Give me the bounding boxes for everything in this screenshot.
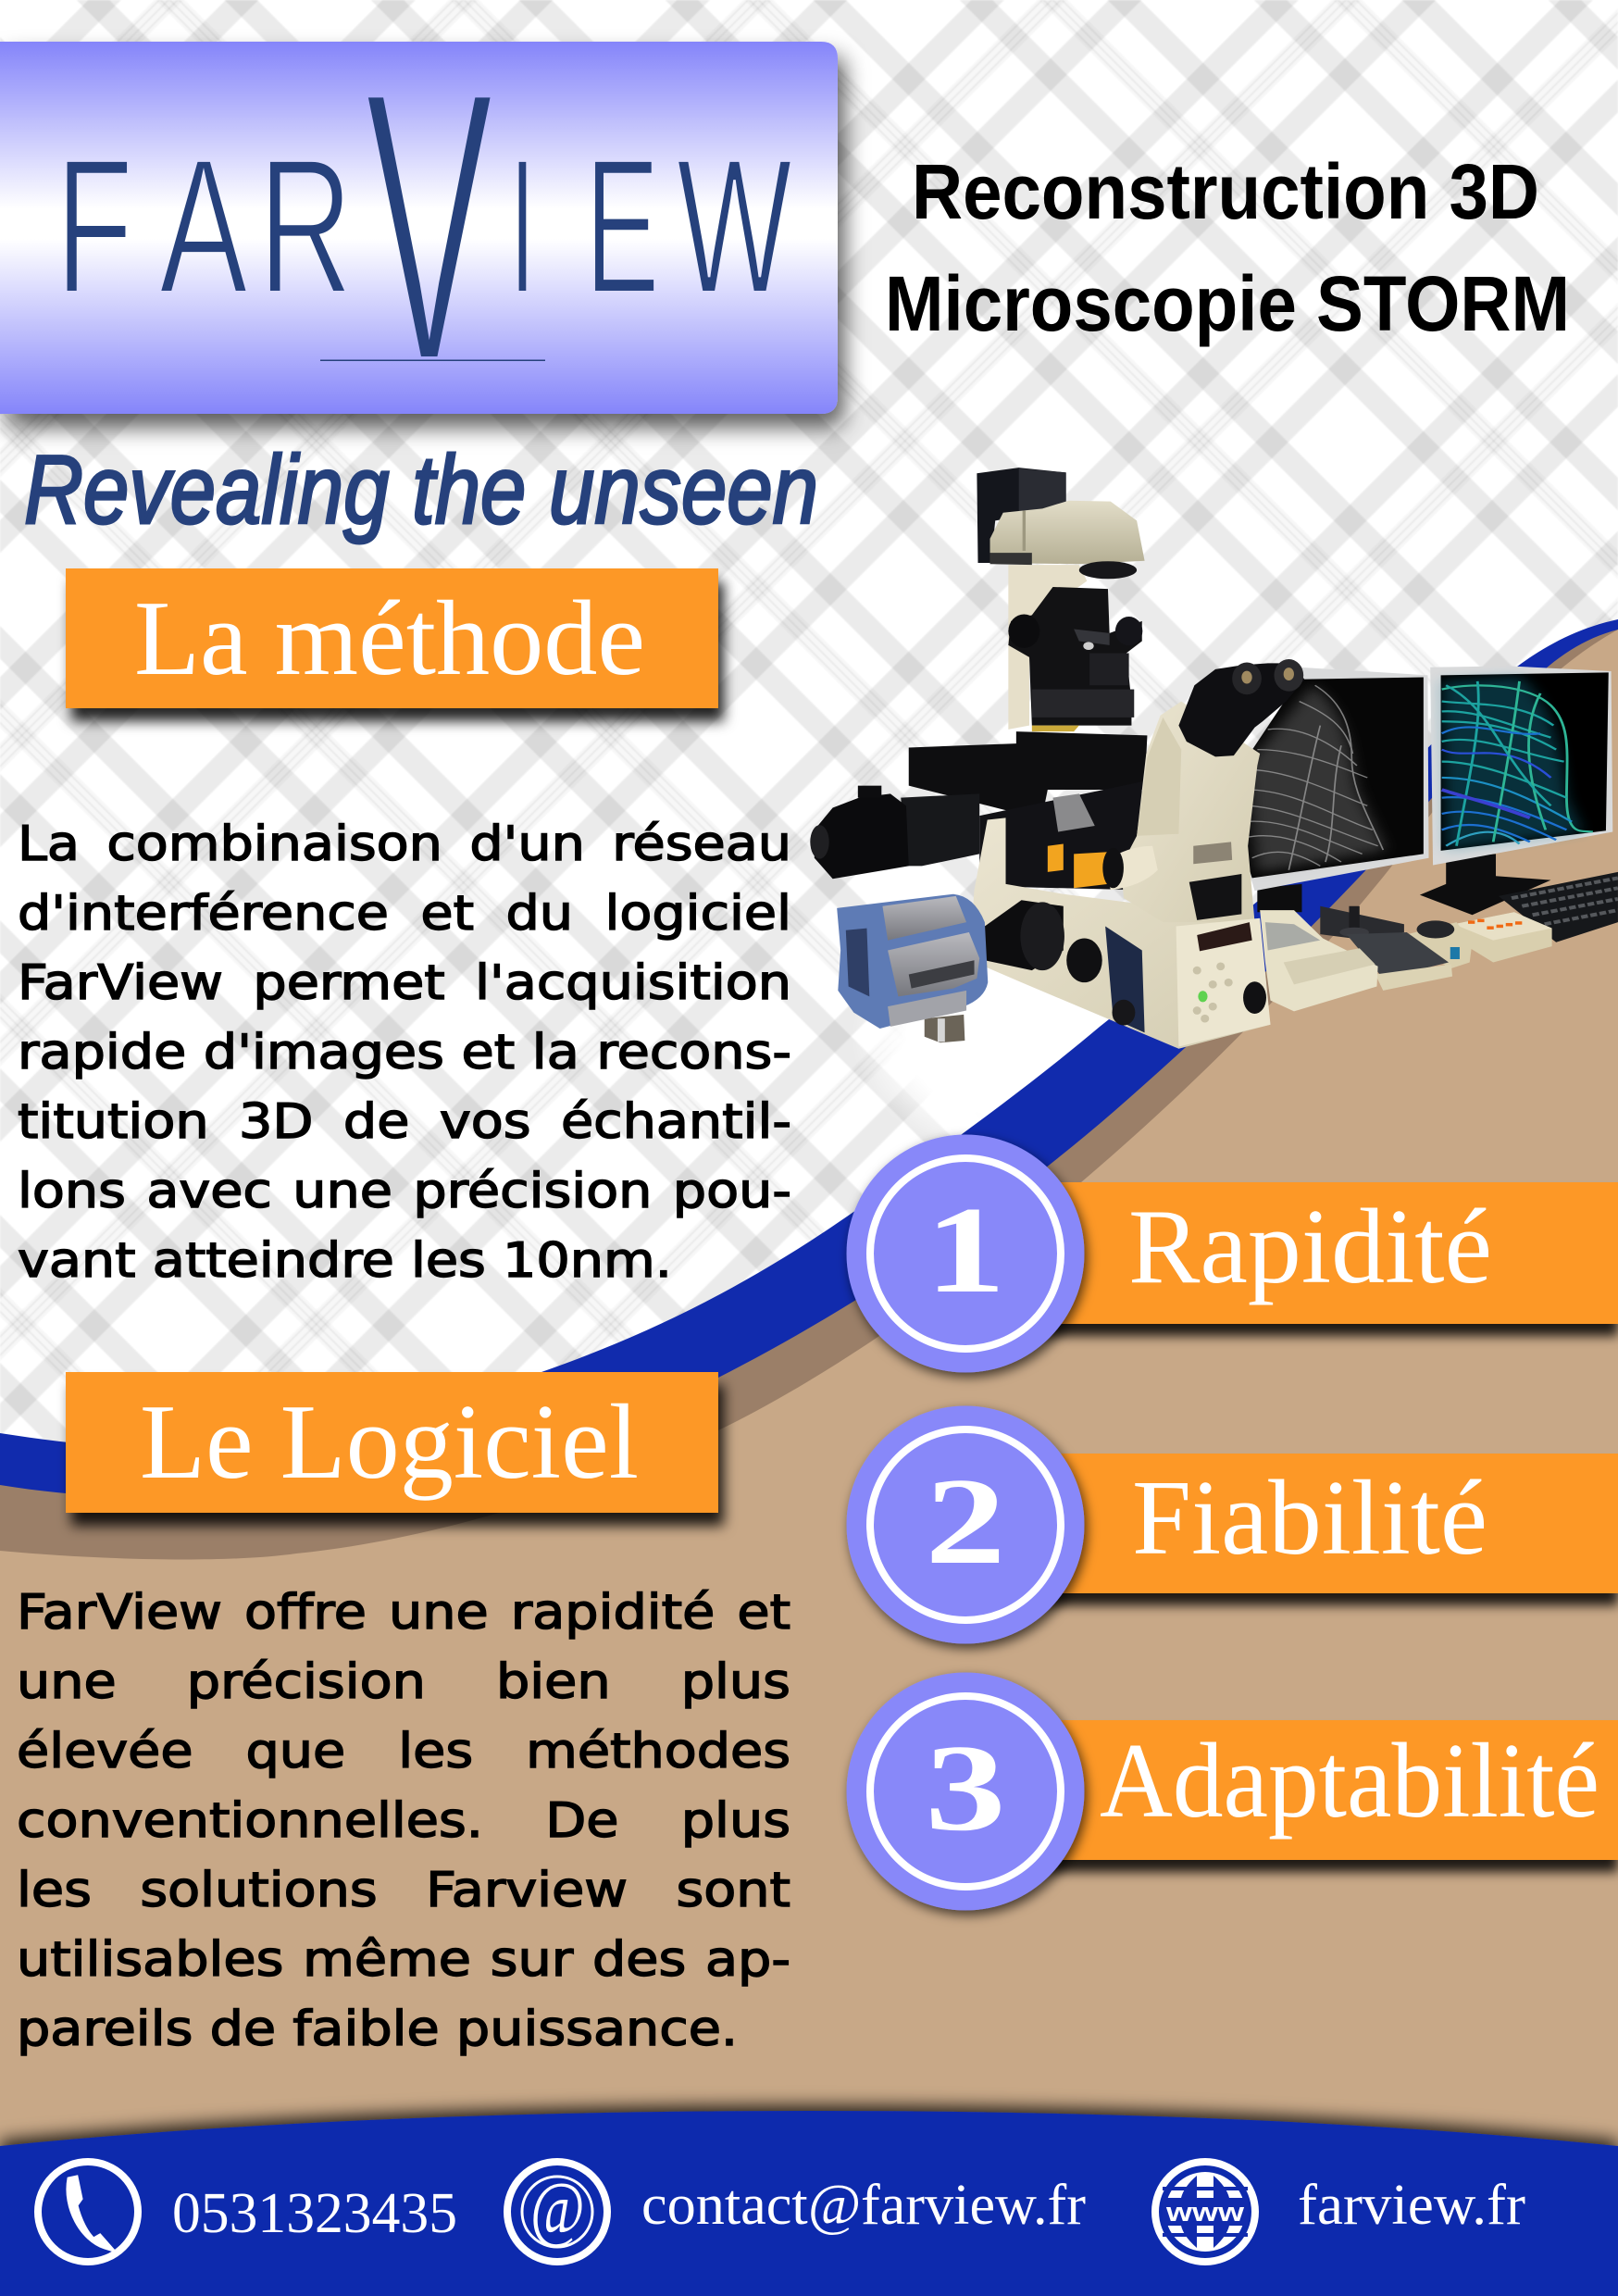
number badge 3 [846,1672,1085,1911]
logo panel [0,11,838,443]
number badge 1 [846,1135,1085,1372]
logo wordmark: FARVIEW: F [56,119,133,334]
icon: globe www: www [1165,2198,1245,2227]
ribbon 2: Fiabilité [1132,1459,1487,1578]
icon: at sign [507,2162,607,2262]
ribbon 3 [965,1720,1618,1860]
text block: La méthode: rapide d'images et la recons- [18,1025,791,1080]
left monitor [1241,668,1429,912]
number badge 2: 2 [925,1453,1006,1590]
microscope body [972,702,1271,1049]
eyepieces [1178,659,1304,756]
contact: phone number: 0531323435 [172,2182,457,2245]
heading: Le Logiciel: Le Logiciel [140,1383,639,1502]
text block: Le Logiciel: FarView offre une rapidité et [17,1585,790,1641]
ribbon 1 [965,1182,1618,1324]
title: Reconstruction 3D [912,148,1539,235]
text block: La méthode: lons avec une précision pou- [18,1164,791,1219]
number badge 1: 1 [925,1181,1006,1318]
text block: La méthode: titution 3D de vos échantil- [18,1094,791,1150]
ribbon 1: Rapidité [1128,1188,1492,1306]
tagline: Revealing the unseen [24,436,818,544]
text block: Le Logiciel [17,1585,790,2057]
heading: Le Logiciel [66,1372,718,1513]
logo wordmark: FARVIEW: V [365,11,494,443]
text block: Le Logiciel: utilisables même sur des ap- [17,1932,790,1988]
number badge 3: 3 [925,1719,1006,1856]
stage [909,731,1147,816]
feature 2: Fiabilité [846,1405,1618,1644]
text block: Le Logiciel: les solutions Farview sont [17,1863,790,1918]
camera [837,894,988,1042]
logo wordmark: FARVIEW: E [585,119,659,334]
tan lower background [0,630,1618,2296]
text block: Le Logiciel: une précision bien plus [17,1654,790,1710]
text block: La méthode: FarView permet l'acquisition [18,955,791,1011]
right monitor [1420,666,1612,915]
brown swoosh band [0,630,1618,2296]
heading: La méthode: La méthode [134,580,645,698]
contact: email: contact@farview.fr [641,2174,1086,2237]
text block: La méthode: La combinaison d'un réseau [18,817,791,872]
logo wordmark: FARVIEW: A [159,118,248,333]
icon: at sign: @ [530,2166,584,2250]
lamp housing [810,786,979,879]
logo wordmark: FARVIEW: R [258,119,353,333]
title [885,148,1570,347]
text block: La méthode: vant atteindre les 10nm. [18,1233,672,1289]
text block: Le Logiciel: élevée que les méthodes [17,1724,790,1779]
text block: La méthode [18,817,791,1289]
keyboard [1499,872,1618,942]
icon: globe www [1155,2162,1255,2262]
upper illumination column [977,468,1145,731]
control boxes [1260,906,1552,1011]
logo wordmark: FARVIEW: I [509,119,536,333]
footer band [0,2111,1618,2296]
text block: Le Logiciel: conventionnelles. De plus [17,1793,790,1849]
logo wordmark: FARVIEW [56,11,792,443]
icon: phone [38,2162,138,2262]
feature 1: Rapidité [846,1135,1618,1372]
logo wordmark: FARVIEW: W [677,118,792,333]
contact: website: farview.fr [1298,2174,1525,2237]
ribbon 2 [965,1454,1618,1593]
text block: La méthode: d'interférence et du logiciel [18,886,791,942]
ribbon 3: Adaptabilité [1100,1722,1599,1841]
title: Microscopie STORM [885,260,1570,347]
heading: La méthode [66,568,718,708]
text block: Le Logiciel: pareils de faible puissance. [17,2002,738,2057]
blue swoosh band [0,619,1618,2296]
number badge 2 [846,1405,1085,1644]
microscope and workstation illustration [810,468,1618,1049]
feature 3: Adaptabilité [846,1672,1618,1911]
